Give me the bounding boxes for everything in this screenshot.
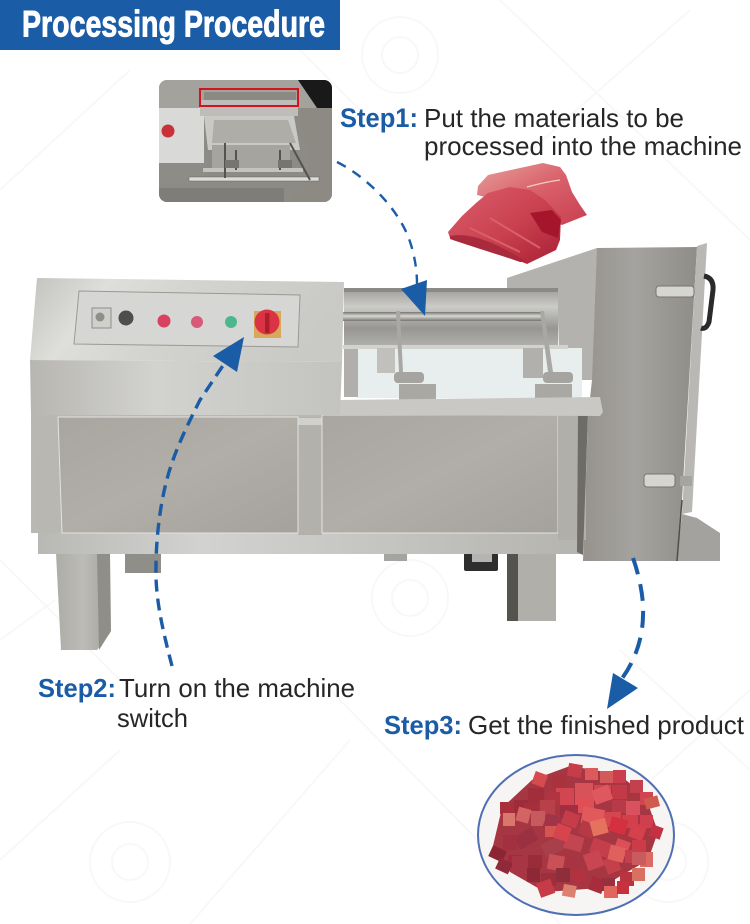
- title banner: [0, 0, 340, 50]
- machine: control housing: [30, 278, 344, 415]
- step 3 label: Step3:: [384, 710, 462, 740]
- step 1 label: Step1:: [340, 103, 418, 133]
- machine: work table: [340, 397, 603, 416]
- step 2 label: Turn on the machine: [119, 673, 355, 703]
- step 1 label: [340, 103, 742, 161]
- arrow: step 1 to hopper: [337, 162, 427, 316]
- machine: feed hopper: [343, 288, 582, 401]
- machine: side cabinet: [583, 243, 720, 561]
- machine: main switch: [254, 311, 281, 338]
- machine: left door: [58, 417, 298, 533]
- inset photo: feed opening: [159, 80, 332, 202]
- step 3 label: Get the finished product: [468, 710, 745, 740]
- inset highlight box: [200, 89, 298, 106]
- machine: rear hopper wall: [507, 248, 598, 380]
- step 1 label: processed into the machine: [424, 131, 742, 161]
- step 2 label: [38, 673, 355, 733]
- plate of diced meat: [478, 755, 674, 915]
- machine: legs: [56, 553, 556, 650]
- machine: right door: [322, 415, 558, 533]
- arrow: cabinet to finished product: [607, 558, 643, 709]
- arrow: step 2 to switch: [156, 337, 244, 666]
- title banner: Processing Procedure: [22, 4, 325, 44]
- step 1 label: Put the materials to be: [424, 103, 684, 133]
- step 2 label: switch: [117, 703, 188, 733]
- raw meat: [448, 163, 587, 264]
- step 2 label: Step2:: [38, 673, 116, 703]
- machine: control plate: [74, 291, 300, 347]
- machine: [30, 243, 720, 650]
- machine: lower body: [31, 415, 588, 555]
